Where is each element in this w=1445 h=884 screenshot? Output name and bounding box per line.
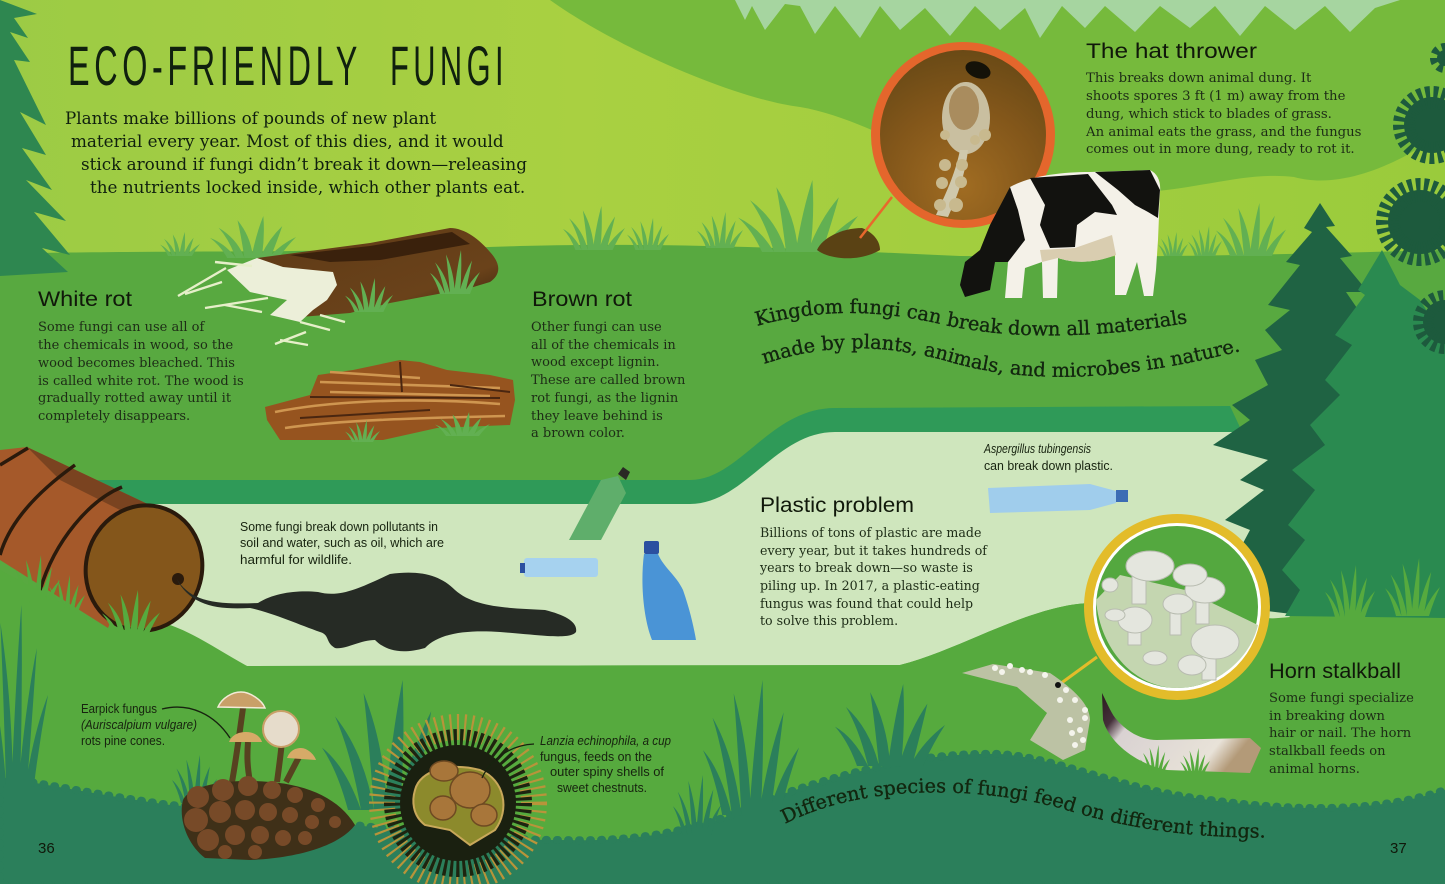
text: horn stalkball: stalkball feeds on: [1269, 744, 1386, 759]
text: hat thrower: dung, which stick to blades of grass.: [1086, 107, 1332, 122]
text: hat thrower: shoots spores 3 ft (1 m) away from the: [1086, 89, 1346, 104]
note: aspergillus: [983, 442, 1113, 473]
callout line: dung to circle: [860, 197, 892, 238]
grass under right trees: [1325, 558, 1440, 617]
brown rot log: [265, 360, 515, 442]
note: lanzia: sweet chestnuts.: [557, 781, 647, 795]
oil slick: [176, 573, 576, 651]
grass tufts on the horizon: [160, 180, 1286, 258]
pine cone with earpick fungi: [182, 692, 355, 860]
text: brown rot: These are called brown: [531, 373, 686, 388]
background: meadow: [0, 245, 1445, 884]
text: hat thrower: comes out in more dung, ready to rot it.: [1086, 142, 1355, 157]
rotting log: white rot: [178, 228, 498, 345]
dung pile: [817, 228, 880, 258]
curved caption: different species: Different species of fungi feed on different things.: [780, 778, 1264, 842]
text: hat thrower: An animal eats the grass, and the fungus: [1085, 125, 1362, 140]
lower grass clumps: [0, 605, 945, 835]
text: white rot: completely disappears.: [38, 409, 190, 424]
text: plastic problem: fungus was found that could help: [760, 596, 973, 611]
text: brown rot: Other fungi can use: [531, 320, 662, 335]
text: brown rot: all of the chemicals in: [531, 338, 676, 353]
photo circle: horn stalkball: [1084, 514, 1270, 700]
note: lanzia: fungus, feeds on the: [540, 750, 652, 764]
bare horn: [1102, 693, 1261, 774]
text: plastic problem: to solve this problem.: [760, 613, 898, 628]
spiny chestnut with cup fungus: [382, 727, 534, 879]
note: earpick fungus: rots pine cones.: [81, 734, 165, 748]
curved caption: kingdom fungi line 2: made by plants, animals, and microbes in nature.: [762, 334, 1239, 377]
heading: brown rot: Brown rot: [532, 288, 632, 311]
text: plastic problem: Billions of tons of plastic are made: [760, 525, 981, 540]
intro text: the nutrients locked inside, which other plants eat.: [90, 177, 525, 197]
curved caption: kingdom fungi: Kingdom fungi can break down all materials: [754, 298, 1186, 336]
foreground: dark ground band: [0, 754, 1445, 884]
text: brown rot: they leave behind is: [531, 409, 663, 424]
page number left: 36: [38, 840, 55, 857]
page number right: 37: [1390, 840, 1407, 857]
note: earpick fungus: (Auriscalpium vulgare): [81, 718, 197, 732]
text: white rot: is called white rot. The wood is: [38, 374, 244, 389]
intro text: stick around if fungi didn’t break it down—releasing: [81, 154, 527, 174]
note: pollutants: Some fungi break down pollutants in: [240, 520, 438, 534]
note: aspergillus: can break down plastic.: [984, 459, 1113, 473]
text: hat thrower: This breaks down animal dung. It: [1086, 71, 1312, 86]
note: lanzia: outer spiny shells of: [550, 765, 665, 779]
heading: horn stalkball: Horn stalkball: [1269, 660, 1401, 683]
note: earpick fungus: Earpick fungus: [81, 702, 157, 716]
lower meadow: [0, 570, 1445, 884]
note: earpick fungus: [81, 702, 197, 748]
text: horn stalkball: hair or nail. The horn: [1269, 726, 1412, 741]
bottles in river: [520, 467, 1128, 640]
tree: right light: [1282, 250, 1445, 618]
river bank shadow: [80, 406, 1260, 505]
note: pollutants: soil and water, such as oil, which are: [240, 536, 444, 550]
grass at barrel: [10, 555, 160, 635]
text: white rot: the chemicals in wood, so the: [38, 338, 234, 353]
note: pollutants: harmful for wildlife.: [240, 553, 352, 567]
text: plastic problem: every year, but it takes hundreds of: [760, 543, 988, 558]
text: horn stalkball: Some fungi specialize: [1269, 691, 1414, 706]
text: white rot: gradually rotted away until it: [38, 391, 232, 406]
background: pale distant forest: [735, 0, 1400, 38]
horn with fungus: [962, 663, 1090, 760]
heading: white rot: White rot: [38, 288, 132, 311]
text: brown rot: a brown color.: [531, 426, 625, 441]
text: white rot: wood becomes bleached. This: [38, 356, 235, 371]
note: lanzia: Lanzia echinophila, a cup: [540, 734, 671, 748]
tree: left: [0, 0, 70, 276]
note: pollutants: [240, 520, 444, 567]
background: far hill: [550, 0, 1445, 193]
photo circle: hat thrower fungus: [871, 42, 1055, 228]
text: plastic problem: years to break down—so waste is: [759, 560, 973, 575]
callout line: horn to circle: [1060, 657, 1097, 684]
intro text: Plants make billions of pounds of new plant: [65, 108, 436, 128]
heading: plastic problem: Plastic problem: [760, 494, 914, 517]
note: lanzia: [540, 734, 671, 795]
tree: right dark: [1213, 203, 1445, 615]
text: plastic problem: piling up. In 2017, a plastic-eating: [760, 578, 980, 593]
oil barrel: [0, 447, 216, 644]
arrow: earpick note to fungus: [162, 707, 230, 738]
title: FUNGI: [390, 34, 508, 97]
dark palm fronds right: [1388, 50, 1445, 344]
cow: [960, 170, 1160, 298]
note: aspergillus: Aspergillus tubingensis: [983, 442, 1091, 456]
text: horn stalkball: in breaking down: [1269, 709, 1386, 724]
text: horn stalkball: animal horns.: [1269, 762, 1360, 777]
text: brown rot: rot fungi, as the lignin: [531, 391, 679, 406]
text: white rot: Some fungi can use all of: [38, 320, 205, 335]
text: brown rot: wood except lignin.: [531, 355, 660, 370]
intro text: material every year. Most of this dies, and it would: [71, 131, 504, 151]
river: [100, 432, 1290, 666]
title: ECO-FRIENDLY: [68, 34, 362, 97]
heading: hat thrower: The hat thrower: [1086, 40, 1257, 63]
arrow: lanzia note to cup: [482, 744, 534, 778]
